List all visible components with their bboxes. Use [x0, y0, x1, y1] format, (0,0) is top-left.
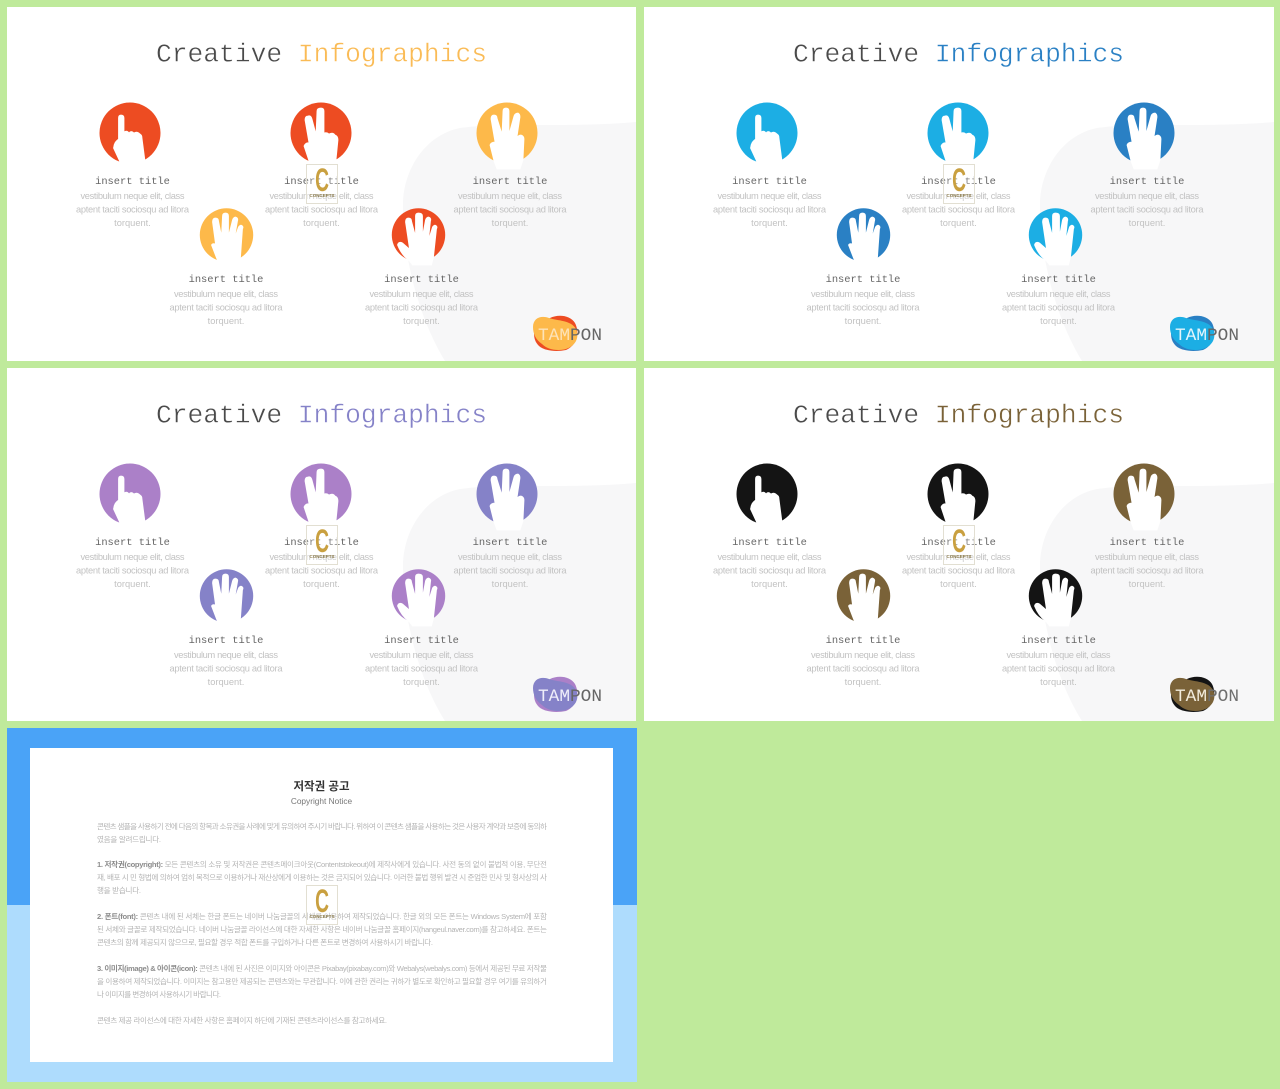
item: three fingers hand: torquent.	[492, 218, 528, 228]
item: three fingers hand: vestibulum neque elit, class	[1095, 191, 1199, 201]
intro paragraph: 였음을 알려드립니다.	[97, 834, 161, 844]
item: three fingers hand	[1090, 464, 1204, 589]
item: two fingers hand	[902, 464, 1016, 589]
item: pointing hand: torquent.	[114, 218, 151, 228]
item: open hand: vestibulum neque elit, class	[370, 289, 474, 299]
item: two fingers hand: insert title	[921, 537, 996, 549]
watermark	[306, 162, 338, 204]
intro paragraph: 콘텐츠 샘플을 사용하기 전에 다음의 항목과 소유권을 사례에 맞게 유의하여 주시기 바랍니다. 위하여 이 콘텐츠 샘플을 사용하는 것은 사용자 계약과 보증에 동의하	[97, 821, 547, 831]
item: two fingers hand: aptent taciti sociosqu ad litora	[265, 204, 379, 214]
clause 2: font: 된 서체와 글꼴로 제작되었습니다. 네이버 나눔글꼴 라이선스에 대한 자세한 사항은 네이버 나눔글꼴 홈페이지(hangeul.naver.com)를 참고하세요. 폰트는	[97, 924, 547, 934]
watermark: CONCEPTS	[309, 554, 335, 559]
item: three fingers hand: insert title	[473, 537, 547, 549]
item: two fingers hand: torquent.	[940, 218, 977, 228]
item: two fingers hand: insert title	[921, 176, 996, 188]
item: pointing hand: vestibulum neque elit, class	[718, 191, 822, 201]
logo	[1170, 316, 1239, 351]
item: four fingers hand	[806, 569, 920, 687]
item: three fingers hand: insert title	[1110, 176, 1184, 188]
item: two fingers hand: aptent taciti sociosqu ad litora	[902, 204, 1016, 214]
item: open hand	[1002, 208, 1116, 326]
clause 3: image and icon	[97, 963, 547, 999]
logo: TAMPON	[538, 687, 602, 707]
logo	[533, 677, 602, 712]
item: three fingers hand: torquent.	[1129, 579, 1165, 589]
clause 1: copyright: 행을 받습니다.	[97, 885, 141, 895]
item: pointing hand: aptent taciti sociosqu ad litora	[76, 566, 190, 576]
item: two fingers hand: aptent taciti sociosqu ad litora	[902, 566, 1016, 576]
item: two fingers hand	[265, 464, 379, 589]
item: three fingers hand: aptent taciti sociosqu ad litora	[454, 566, 567, 576]
item: open hand: insert title	[1021, 274, 1096, 286]
clause 3: image and icon: 3. 이미지(image) & 아이콘(icon): 콘텐츠 내에 된 사진은 이미지와 아이콘은 Pixabay(pixabay.com)와 Webalys(webalys.com) 등에서 제공된 무료 저작물	[97, 963, 547, 973]
item: pointing hand: vestibulum neque elit, class	[718, 552, 822, 562]
item: open hand: aptent taciti sociosqu ad litora	[1002, 302, 1116, 312]
item: open hand: insert title	[1021, 635, 1096, 647]
logo: TAMPON	[1175, 326, 1239, 346]
panel: black and brown creative infographics	[644, 368, 1274, 721]
item: pointing hand: torquent.	[751, 579, 788, 589]
clause 2: font: 콘텐츠의 함께 제공되지 않으므로, 필요할 경우 적합 폰트를 구입하거나 다른 폰트로 변경하여 사용하시기 바랍니다.	[97, 937, 433, 947]
item: three fingers hand: aptent taciti sociosqu ad litora	[1090, 204, 1204, 214]
item: open hand	[365, 569, 479, 687]
item: open hand: torquent.	[1040, 316, 1077, 326]
watermark: CONCEPTS	[946, 193, 972, 198]
clause 3: image and icon: 을 이용하여 제작되었습니다. 이미지는 참고용만 제공되는 콘텐츠와는 무관합니다. 이에 관한 권리는 귀하가 별도로 확인하고 필요할 경우 여기를 유의하거	[97, 976, 547, 986]
item: open hand: aptent taciti sociosqu ad litora	[365, 302, 479, 312]
item: three fingers hand: vestibulum neque elit, class	[458, 552, 562, 562]
item: open hand	[1002, 569, 1116, 687]
item: three fingers hand: torquent.	[492, 579, 528, 589]
item: four fingers hand: vestibulum neque elit, class	[174, 650, 278, 660]
item: three fingers hand: insert title	[473, 176, 547, 188]
panel: copyright notice	[7, 728, 637, 1082]
item: open hand: vestibulum neque elit, class	[1006, 650, 1111, 660]
item: four fingers hand: torquent.	[208, 677, 244, 687]
panel: orange creative infographics	[7, 7, 636, 361]
item: four fingers hand	[806, 208, 920, 326]
item: four fingers hand: torquent.	[208, 316, 244, 326]
item: pointing hand	[76, 102, 190, 228]
clause 1: copyright: 1. 저작권(copyright): 모든 콘텐츠의 소유 및 저작권은 콘텐츠메이크아웃(Contentstokeout)에 제작사에게 있습니다. 사전 동의 없이 불법적 이용, 무단전	[97, 859, 547, 869]
item: two fingers hand	[902, 102, 1016, 228]
item: two fingers hand: insert title	[284, 176, 359, 188]
item: open hand: vestibulum neque elit, class	[1006, 289, 1111, 299]
item: four fingers hand	[170, 569, 283, 687]
logo: TAMPON	[1175, 687, 1239, 707]
item: pointing hand: torquent.	[751, 218, 788, 228]
watermark: C	[315, 162, 329, 198]
item: pointing hand: insert title	[95, 537, 170, 549]
item: pointing hand: aptent taciti sociosqu ad litora	[76, 204, 190, 214]
item: open hand: aptent taciti sociosqu ad litora	[1002, 664, 1116, 674]
item: two fingers hand: vestibulum neque elit, class	[270, 552, 374, 562]
item: open hand: aptent taciti sociosqu ad litora	[365, 664, 479, 674]
watermark	[306, 883, 338, 924]
watermark: CONCEPTS	[309, 193, 335, 198]
item: open hand: vestibulum neque elit, class	[370, 650, 474, 660]
copyright heading: 저작권 공고	[293, 779, 350, 793]
heading: Creative Infographics	[156, 400, 487, 430]
item: two fingers hand: torquent.	[303, 218, 340, 228]
item: pointing hand: vestibulum neque elit, class	[80, 552, 185, 562]
item: three fingers hand: aptent taciti sociosqu ad litora	[454, 204, 567, 214]
item: four fingers hand: insert title	[826, 274, 900, 286]
item: pointing hand	[713, 102, 827, 228]
logo	[533, 316, 602, 351]
watermark	[306, 523, 338, 564]
item: pointing hand: vestibulum neque elit, class	[80, 191, 185, 201]
item: three fingers hand	[1090, 102, 1204, 228]
item: pointing hand: insert title	[732, 176, 807, 188]
item: pointing hand	[76, 464, 190, 589]
item: four fingers hand: insert title	[826, 635, 900, 647]
item: four fingers hand	[170, 208, 283, 326]
item: pointing hand: aptent taciti sociosqu ad litora	[713, 204, 827, 214]
item: open hand: torquent.	[1040, 677, 1077, 687]
item: pointing hand: torquent.	[114, 579, 151, 589]
item: four fingers hand: torquent.	[845, 677, 881, 687]
item: two fingers hand: insert title	[284, 537, 359, 549]
item: two fingers hand: vestibulum neque elit, class	[906, 191, 1011, 201]
logo	[1170, 677, 1239, 712]
heading: Creative Infographics	[793, 40, 1124, 70]
item: three fingers hand	[454, 464, 567, 589]
item: three fingers hand: insert title	[1110, 537, 1184, 549]
item: four fingers hand: aptent taciti sociosqu ad litora	[806, 664, 920, 674]
panel: purple creative infographics	[7, 368, 636, 721]
license note: 콘텐츠 제공 라이선스에 대한 자세한 사항은 홈페이지 하단에 기재된 콘텐츠라이선스를 참고하세요.	[97, 1015, 387, 1025]
item: two fingers hand: vestibulum neque elit, class	[270, 191, 374, 201]
watermark: CONCEPTS	[309, 914, 335, 919]
clause 1: copyright: 재, 배포 시 민 형법에 의하여 엄히 목적으로 이용하거나 재산상에게 이용하는 것은 금지되어 있습니다. 이러한 불법 행위 발견 시 준엄한 민사 및 형사상의 사	[97, 872, 547, 882]
item: open hand: torquent.	[403, 677, 440, 687]
item: two fingers hand: vestibulum neque elit, class	[906, 552, 1011, 562]
item: three fingers hand: vestibulum neque elit, class	[458, 191, 562, 201]
watermark	[944, 162, 974, 204]
watermark: C	[952, 162, 966, 198]
item: four fingers hand: vestibulum neque elit, class	[174, 289, 278, 299]
item: four fingers hand: insert title	[189, 635, 263, 647]
item: pointing hand	[713, 464, 827, 589]
copyright subheading: Copyright Notice	[291, 796, 353, 806]
item: pointing hand: aptent taciti sociosqu ad litora	[713, 566, 827, 576]
item: four fingers hand: aptent taciti sociosqu ad litora	[170, 302, 283, 312]
item: four fingers hand: torquent.	[845, 316, 881, 326]
logo: TAMPON	[538, 326, 602, 346]
item: open hand: insert title	[384, 274, 459, 286]
item: open hand: torquent.	[403, 316, 440, 326]
heading: Creative Infographics	[156, 40, 487, 70]
item: three fingers hand	[454, 102, 567, 228]
item: four fingers hand: insert title	[189, 274, 263, 286]
item: pointing hand: insert title	[732, 537, 807, 549]
clause 2: font: 2. 폰트(font): 콘텐츠 내에 된 서체는 한글 폰트는 네이버 나눔글꼴의 서체를 이용하여 제작되었습니다. 한글 외의 모든 폰트는 Windows System에 포함	[97, 911, 547, 921]
watermark: C	[315, 523, 329, 559]
item: three fingers hand: aptent taciti sociosqu ad litora	[1090, 566, 1204, 576]
heading: Creative Infographics	[793, 400, 1124, 430]
watermark: C	[952, 523, 966, 559]
item: pointing hand: insert title	[95, 176, 170, 188]
item: four fingers hand: vestibulum neque elit, class	[811, 650, 915, 660]
item: two fingers hand: torquent.	[940, 579, 977, 589]
item: two fingers hand: aptent taciti sociosqu ad litora	[265, 566, 379, 576]
item: two fingers hand: torquent.	[303, 579, 340, 589]
panel: blue creative infographics	[644, 7, 1274, 361]
watermark: C	[315, 883, 329, 919]
item: four fingers hand: aptent taciti sociosqu ad litora	[806, 302, 920, 312]
item: three fingers hand: torquent.	[1129, 218, 1165, 228]
item: three fingers hand: vestibulum neque elit, class	[1095, 552, 1199, 562]
watermark: CONCEPTS	[946, 554, 972, 559]
item: two fingers hand	[265, 102, 379, 228]
clause 3: image and icon: 나 이미지를 변경하여 사용하시기 바랍니다.	[97, 989, 221, 999]
item: four fingers hand: vestibulum neque elit, class	[811, 289, 915, 299]
item: open hand	[365, 208, 479, 326]
item: four fingers hand: aptent taciti sociosqu ad litora	[170, 664, 283, 674]
clause 2: font	[97, 911, 547, 947]
watermark	[944, 523, 974, 564]
item: open hand: insert title	[384, 635, 459, 647]
intro paragraph	[97, 821, 547, 844]
clause 1: copyright	[97, 859, 547, 895]
